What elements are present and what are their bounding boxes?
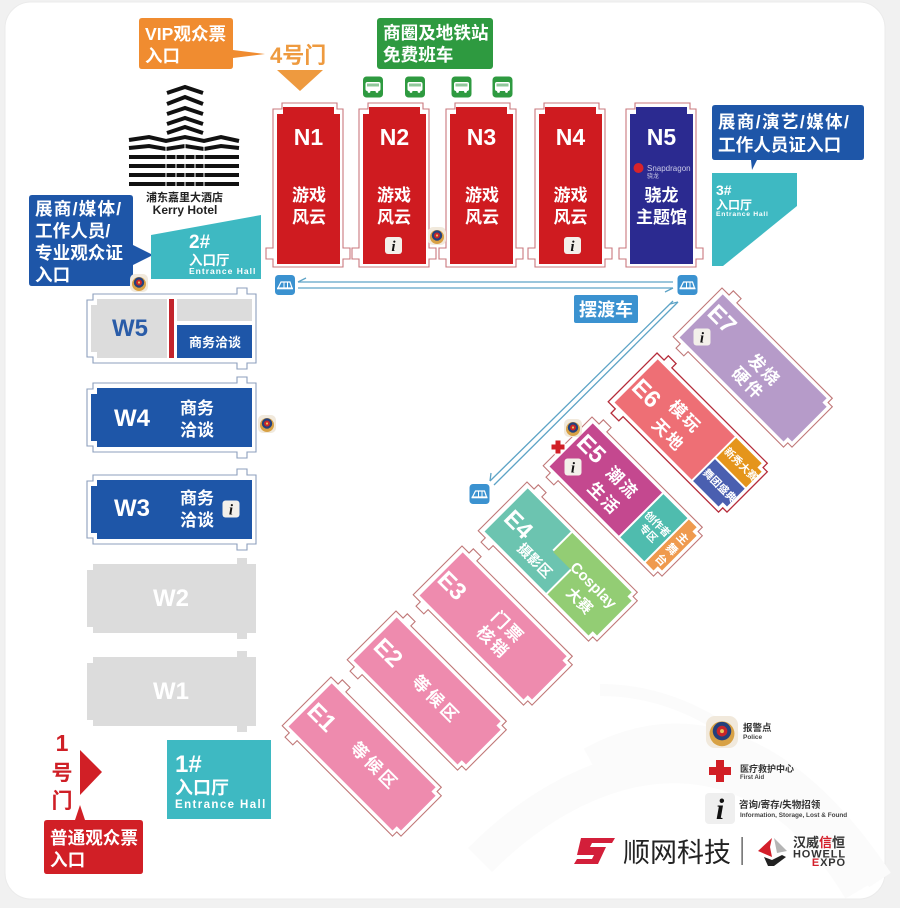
hall W4: 商务 — [180, 399, 214, 418]
legend: information: i — [716, 793, 725, 826]
hall W5: 商务洽谈 — [189, 335, 241, 350]
hall E5: 生活 — [584, 479, 624, 519]
callout: VIP entrance: 入口 — [145, 46, 180, 66]
callout: exhibitor entrance east: 工作人员证入口 — [718, 135, 841, 155]
hall E6: 舞团盛典 — [700, 466, 739, 505]
hall W3: 洽谈 — [180, 511, 214, 530]
callout: exhibitor entrance west: 入口 — [35, 265, 70, 285]
hall N3 — [439, 103, 523, 267]
legend: first aid — [709, 760, 794, 782]
hall N5: 主题馆 — [636, 207, 687, 227]
hall E5: 潮流 — [602, 463, 642, 503]
hall N2: i — [391, 239, 396, 255]
hall N4: 风云 — [554, 208, 588, 227]
legend: first aid: First Aid — [740, 775, 764, 781]
entrance hall 3 — [712, 173, 797, 266]
entrance hall 2: Entrance Hall — [189, 266, 256, 276]
hall E3: E3 — [432, 566, 472, 606]
callout: exhibitor entrance west — [29, 195, 153, 286]
hall W4: 洽谈 — [180, 421, 214, 440]
hall W5 — [87, 288, 256, 369]
info icon E5: i — [571, 460, 576, 476]
hall E4: Cosplay — [566, 559, 620, 613]
hall W3: i — [229, 502, 234, 518]
hall E4 — [474, 478, 646, 650]
logo: Howell Expo: HOWELL — [793, 848, 846, 860]
legend: police — [706, 716, 772, 748]
Kerry Hotel icon and label: 浦东嘉里大酒店 — [146, 190, 223, 204]
hall E1: E1 — [302, 698, 341, 738]
entrance hall 1 — [167, 740, 271, 819]
hall E7: E7 — [702, 300, 742, 339]
hall W4: W4 — [114, 405, 151, 432]
gate 1 label: 号 — [52, 762, 72, 785]
hall W5: W5 — [112, 315, 148, 342]
hall W4 — [87, 377, 256, 458]
hall N3: 游戏 — [465, 185, 499, 205]
hall W2: W2 — [153, 585, 189, 612]
hall E4: 摄影区 — [514, 540, 555, 581]
shuttle icons — [275, 275, 698, 504]
hall N4: 游戏 — [554, 185, 588, 205]
hall E4: 大赛 — [562, 584, 596, 618]
hall E4: E4 — [498, 505, 539, 545]
hall E6: E6 — [626, 374, 666, 414]
entrance hall 1: 入口厅 — [175, 778, 229, 798]
hall N5: 骁龙 — [644, 186, 678, 205]
background swoosh — [480, 690, 880, 890]
logo: Howell Expo: EXPO — [812, 857, 846, 869]
hall N4: i — [570, 239, 575, 255]
hall W2 — [87, 558, 256, 639]
hall N5: N5 — [647, 124, 676, 150]
gate 1 label — [52, 730, 102, 813]
entrance hall 3: 入口厅 — [716, 198, 752, 212]
hall W1: W1 — [153, 678, 189, 705]
callout: free shuttle bus — [377, 18, 493, 69]
callout: exhibitor entrance west: 工作人员/ — [35, 221, 110, 241]
info icon E7: i — [700, 330, 705, 346]
hall E1: 等候区 — [347, 738, 403, 794]
legend: first aid: 医疗救护中心 — [740, 763, 794, 774]
hall E6: 模玩 — [665, 397, 705, 437]
legend — [705, 716, 847, 826]
hall E3: 门票 — [487, 608, 528, 648]
hall E5: 台 — [652, 551, 670, 569]
hall E3: 核销 — [473, 622, 514, 663]
callout: exhibitor entrance west: 专业观众证 — [35, 243, 123, 263]
hall N3: 风云 — [465, 208, 499, 227]
entrance hall 3: Entrance Hall — [716, 211, 769, 218]
hall N1: 游戏 — [292, 185, 326, 205]
callout: exhibitor entrance east: 展商/演艺/媒体/ — [718, 112, 850, 132]
info icon E5 — [564, 458, 582, 476]
hall E5: E5 — [571, 429, 611, 469]
hall E1 — [278, 673, 450, 845]
hall E6 — [604, 349, 776, 521]
hall N2: 游戏 — [377, 185, 411, 205]
hall E6: 新秀大赛 — [721, 445, 761, 484]
hall E5: 主 — [673, 530, 692, 548]
entrance hall 1: Entrance Hall — [175, 799, 267, 811]
first aid cross E5 — [551, 440, 565, 454]
hall E6: 天地 — [648, 415, 688, 456]
legend: information — [705, 793, 847, 826]
hall E7: 硬件 — [728, 364, 768, 404]
hall N5 — [619, 103, 703, 267]
gate 4 label: 4号门 — [270, 43, 326, 68]
logo: Shunwang Technology: 顺网科技 — [623, 838, 731, 868]
logo: Howell Expo — [758, 835, 846, 869]
hall N2: N2 — [380, 124, 409, 150]
hall N4: N4 — [556, 124, 585, 150]
callout: general admission entrance — [44, 805, 143, 874]
callout: general admission entrance: 入口 — [50, 850, 85, 870]
hall E3 — [409, 542, 581, 714]
callout: VIP entrance — [139, 18, 265, 69]
entrance hall 2: 入口厅 — [189, 253, 230, 268]
hall N4 — [528, 103, 612, 267]
gate 1 label: 1 — [56, 730, 69, 756]
callout: exhibitor entrance west: 展商/媒体/ — [35, 199, 122, 219]
police markers — [130, 227, 582, 437]
Kerry Hotel icon and label: Kerry Hotel — [153, 203, 217, 217]
entrance hall 1: 1# — [175, 751, 202, 778]
hall E2: E2 — [368, 633, 408, 673]
shuttle route diagonal — [490, 301, 678, 485]
hall W3: 商务 — [180, 489, 214, 508]
Kerry Hotel icon and label — [129, 87, 239, 217]
entrance hall 2 — [151, 215, 261, 279]
shuttle label: 摆渡车 — [579, 299, 633, 320]
info icon E7 — [694, 328, 710, 346]
entrance hall 2: 2# — [189, 232, 211, 253]
hall N5: 骁龙 — [647, 172, 659, 180]
hall N1: N1 — [294, 124, 323, 150]
entrance hall 3: 3# — [716, 182, 732, 198]
logo divider — [742, 837, 743, 865]
hall E7: 发烧 — [744, 350, 785, 391]
callout: free shuttle bus: 免费班车 — [383, 45, 453, 65]
hall N3: N3 — [467, 124, 496, 150]
hall N2 — [352, 103, 436, 267]
hall E2 — [343, 607, 515, 779]
gate 1 label: 门 — [52, 790, 72, 813]
logo: Shunwang Technology — [574, 838, 731, 868]
hall N1 — [266, 103, 350, 267]
hall W3 — [87, 469, 256, 550]
callout: free shuttle bus: 商圈及地铁站 — [383, 23, 489, 43]
hall N5: Snapdragon — [647, 164, 691, 173]
shuttle route north — [298, 278, 673, 292]
hall E5 — [539, 413, 711, 585]
callout: exhibitor entrance east — [712, 105, 864, 170]
legend: police: Police — [743, 734, 763, 741]
legend: information: 咨询/寄存/失物招领 — [739, 799, 821, 811]
hall N1: 风云 — [292, 208, 326, 227]
bus icons — [363, 76, 512, 98]
gate 4 label — [270, 43, 326, 91]
hall E2: 等候区 — [408, 671, 465, 728]
hall E7 — [669, 284, 841, 456]
shuttle label — [574, 295, 638, 323]
hall W1 — [87, 651, 256, 732]
callout: general admission entrance: 普通观众票 — [50, 828, 138, 848]
legend: police: 报警点 — [743, 722, 772, 734]
hall W3: W3 — [114, 495, 150, 522]
hall N2: 风云 — [377, 208, 411, 227]
hall E5: 专区 — [636, 521, 661, 546]
callout: VIP entrance: VIP观众票 — [145, 24, 226, 44]
hall E5: 创作者 — [642, 508, 673, 540]
hall E5: 舞 — [663, 540, 681, 559]
logo: Howell Expo: 汉威信恒 — [793, 835, 845, 850]
legend: information: Information, Storage, Lost & Found — [740, 812, 847, 819]
